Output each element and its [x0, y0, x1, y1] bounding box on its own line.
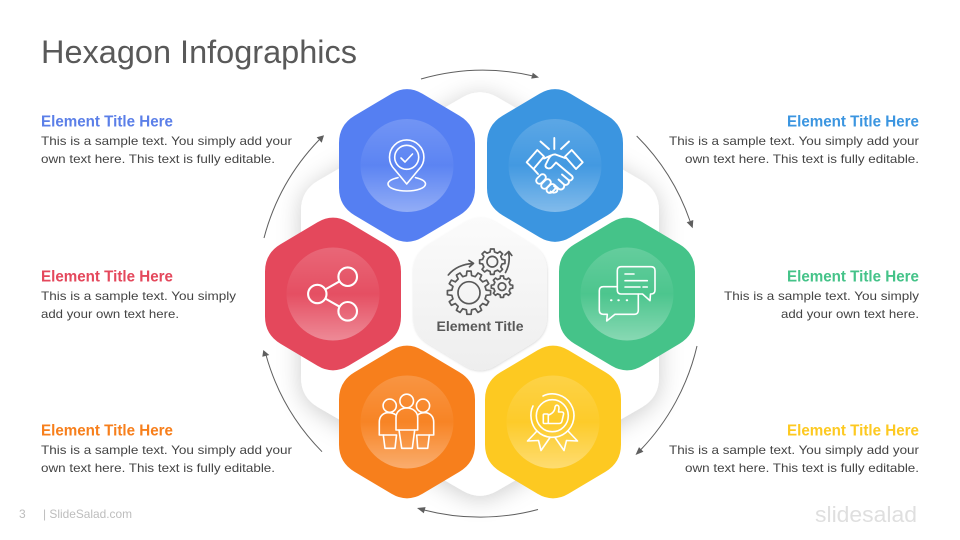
text block: middle right: Element Title Here [787, 268, 919, 286]
icon: chat bubbles [599, 267, 655, 321]
text block: top left: Element Title Here [41, 114, 173, 130]
title: Hexagon Infographics [41, 34, 357, 70]
text block: bottom left: This is a sample text. You simply add your [41, 443, 292, 457]
text block: top right: This is a sample text. You simply add your [669, 134, 919, 148]
text block: top right: Element Title Here [787, 114, 919, 130]
text block: middle right [724, 268, 919, 321]
footer site link: | SlideSalad.com [43, 507, 132, 521]
cycle arrows [262, 70, 697, 517]
text block: bottom left: Element Title Here [41, 422, 173, 440]
text block: middle right: This is a sample text. You simply [724, 289, 919, 303]
arrow: upper right [637, 136, 693, 228]
icon: group of people [379, 394, 434, 448]
text block: bottom right: This is a sample text. You simply add your [669, 443, 919, 457]
arrow: bottom [417, 507, 538, 517]
background white hexagon [301, 92, 659, 496]
text block: middle left: Element Title Here [41, 268, 173, 286]
text block: top left: own text here. This text is fully editable. [41, 152, 275, 166]
text block: bottom right: own text here. This text is fully editable. [685, 461, 919, 475]
icon: award ribbon with thumbs up [528, 394, 578, 450]
icon: map pin with check [388, 140, 426, 191]
text block: middle left [41, 268, 236, 321]
text block: bottom right: Element Title Here [787, 422, 919, 440]
arrow: lower left [262, 350, 322, 452]
text block: top right [669, 114, 919, 166]
hexagon: share (red) [265, 218, 401, 370]
page number: 3 [19, 507, 26, 521]
center hexagon [413, 218, 547, 370]
center label: Element Title [436, 318, 524, 334]
hexagon: handshake (sky blue) [487, 89, 623, 242]
footer logo: slidesalad [815, 502, 917, 527]
hexagon: location (blue) [339, 89, 475, 242]
text block: middle left: This is a sample text. You simply [41, 289, 236, 303]
arrow: upper left [264, 135, 324, 238]
hexagon: award (yellow) [485, 346, 621, 498]
text block: top left [41, 114, 292, 166]
text block: bottom left: own text here. This text is fully editable. [41, 461, 275, 475]
icon: share nodes [308, 267, 357, 321]
text block: middle right: add your own text here. [781, 307, 919, 321]
hexagon: chat (green) [559, 218, 695, 370]
text block: middle left: add your own text here. [41, 307, 179, 321]
hexagon: team (orange) [339, 346, 475, 498]
text block: top right: own text here. This text is fully editable. [685, 152, 919, 166]
text block: top left: This is a sample text. You simply add your [41, 134, 292, 148]
arrow: top [421, 70, 539, 79]
icon: handshake [527, 138, 583, 194]
text block: bottom left [41, 422, 292, 475]
text block: bottom right [669, 422, 919, 475]
arrow: lower right [636, 346, 697, 455]
icon: gears with arrows [447, 249, 513, 314]
